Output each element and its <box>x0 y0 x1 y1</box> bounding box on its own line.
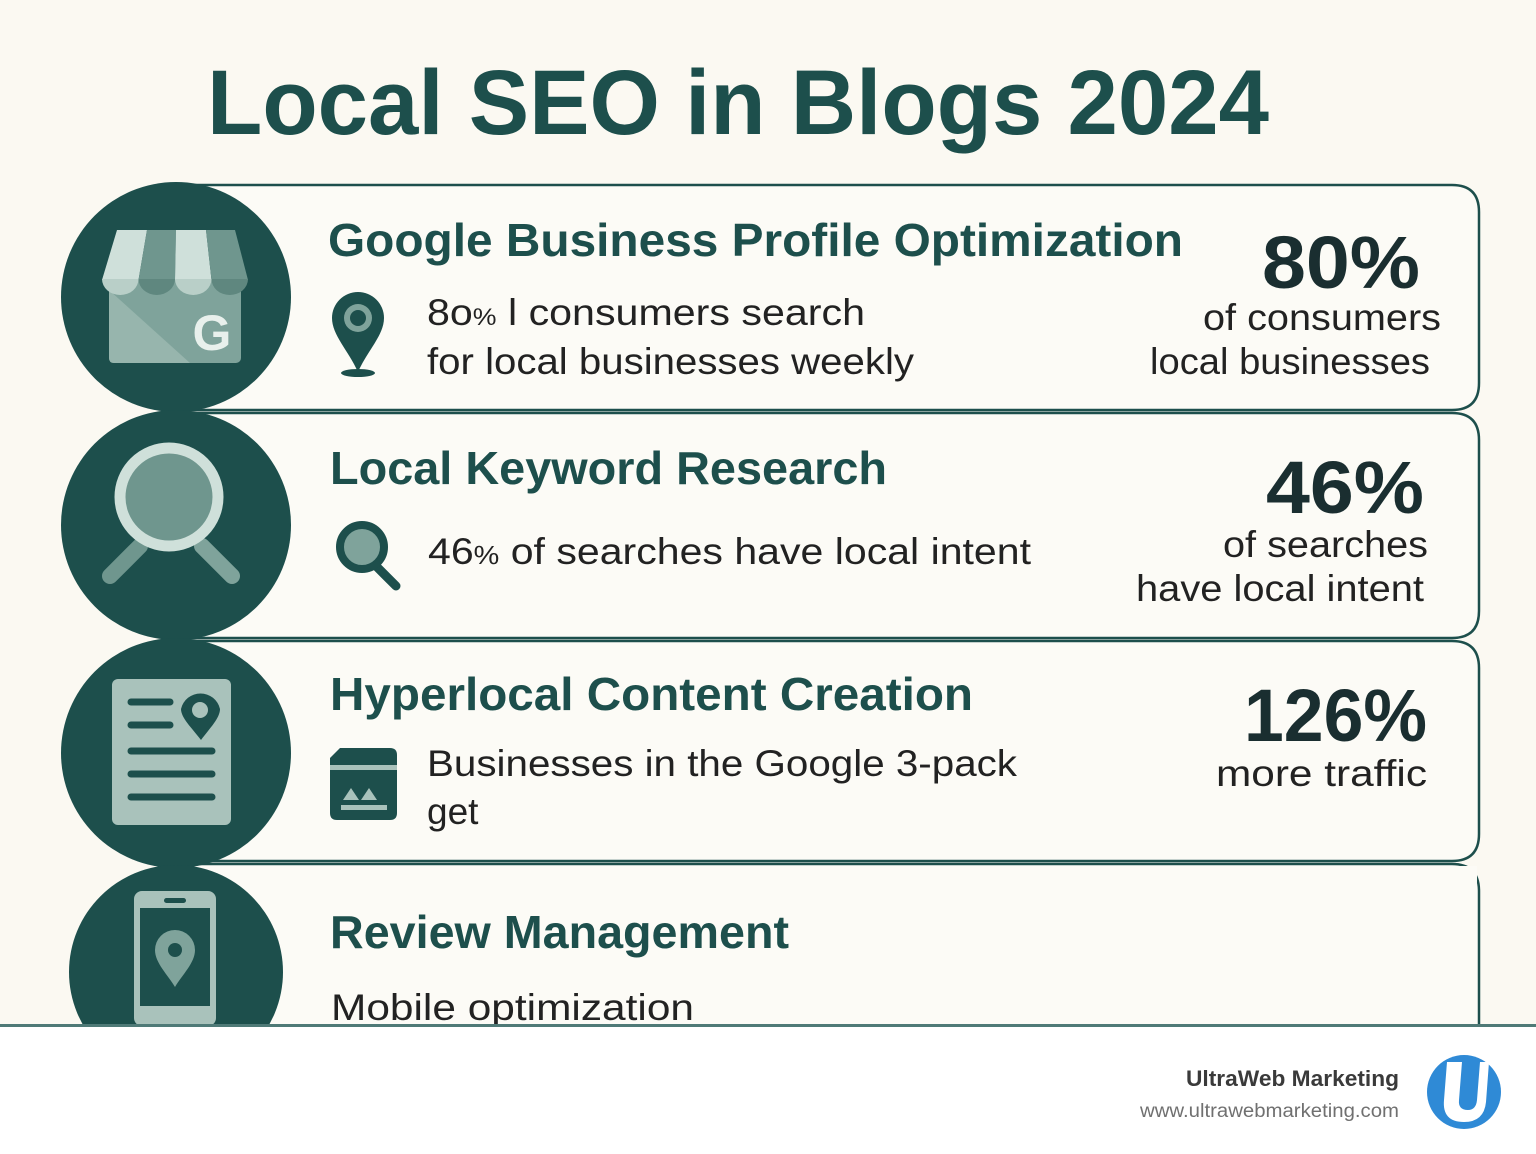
text block: 46% of searches have local intent <box>428 531 1032 572</box>
footer brand name: UltraWeb Marketing <box>1186 1066 1399 1091</box>
stat: 46%: of searches <box>1223 524 1428 565</box>
title: Local SEO in Blogs 2024 <box>207 52 1269 154</box>
text block <box>427 292 915 382</box>
footer url: www.ultrawebmarketing.com <box>1139 1101 1399 1122</box>
panel: local keyword research <box>190 413 1479 638</box>
footer <box>0 1025 1536 1154</box>
icon circle: magnifier <box>61 410 291 640</box>
icon circle: document <box>61 638 291 868</box>
text block: Businesses in the Google 3-pack <box>427 743 1018 784</box>
text block: for local businesses weekly <box>427 341 915 382</box>
icon circle: phone <box>69 865 283 1079</box>
stat: 126%: more traffic <box>1216 753 1427 794</box>
icon circle: store <box>61 182 291 412</box>
icon: small magnifier <box>340 525 396 586</box>
icon circle: store: G <box>193 305 231 361</box>
stat: 46%: 46% <box>1266 446 1424 529</box>
panel: hyperlocal content <box>190 641 1479 861</box>
stat: 46% <box>1136 446 1428 609</box>
stat: 126% <box>1216 674 1427 794</box>
stat: 80%: local businesses <box>1150 341 1430 382</box>
icon: box <box>330 748 397 820</box>
heading: google business profile: Google Business Profile Optimization <box>328 214 1183 266</box>
heading: review management: Review Management <box>330 906 789 958</box>
text block: Mobile optimization <box>331 987 694 1028</box>
heading: keyword research: Local Keyword Research <box>330 442 887 494</box>
stat: 46%: have local intent <box>1136 568 1425 609</box>
stat: 80% <box>1150 221 1441 382</box>
stat: 80%: of consumers <box>1203 297 1441 338</box>
stat: 126%: 126% <box>1244 674 1427 757</box>
text block: 8o% l consumers search <box>427 292 865 333</box>
text block <box>427 743 1018 832</box>
heading: hyperlocal: Hyperlocal Content Creation <box>330 668 973 720</box>
panel: review management <box>190 864 1479 1030</box>
text block: get <box>427 791 479 832</box>
icon: location pin <box>332 292 384 377</box>
panel: google business profile <box>190 185 1479 410</box>
stat: 80%: 80% <box>1262 221 1420 304</box>
icon: logo <box>1427 1055 1501 1129</box>
